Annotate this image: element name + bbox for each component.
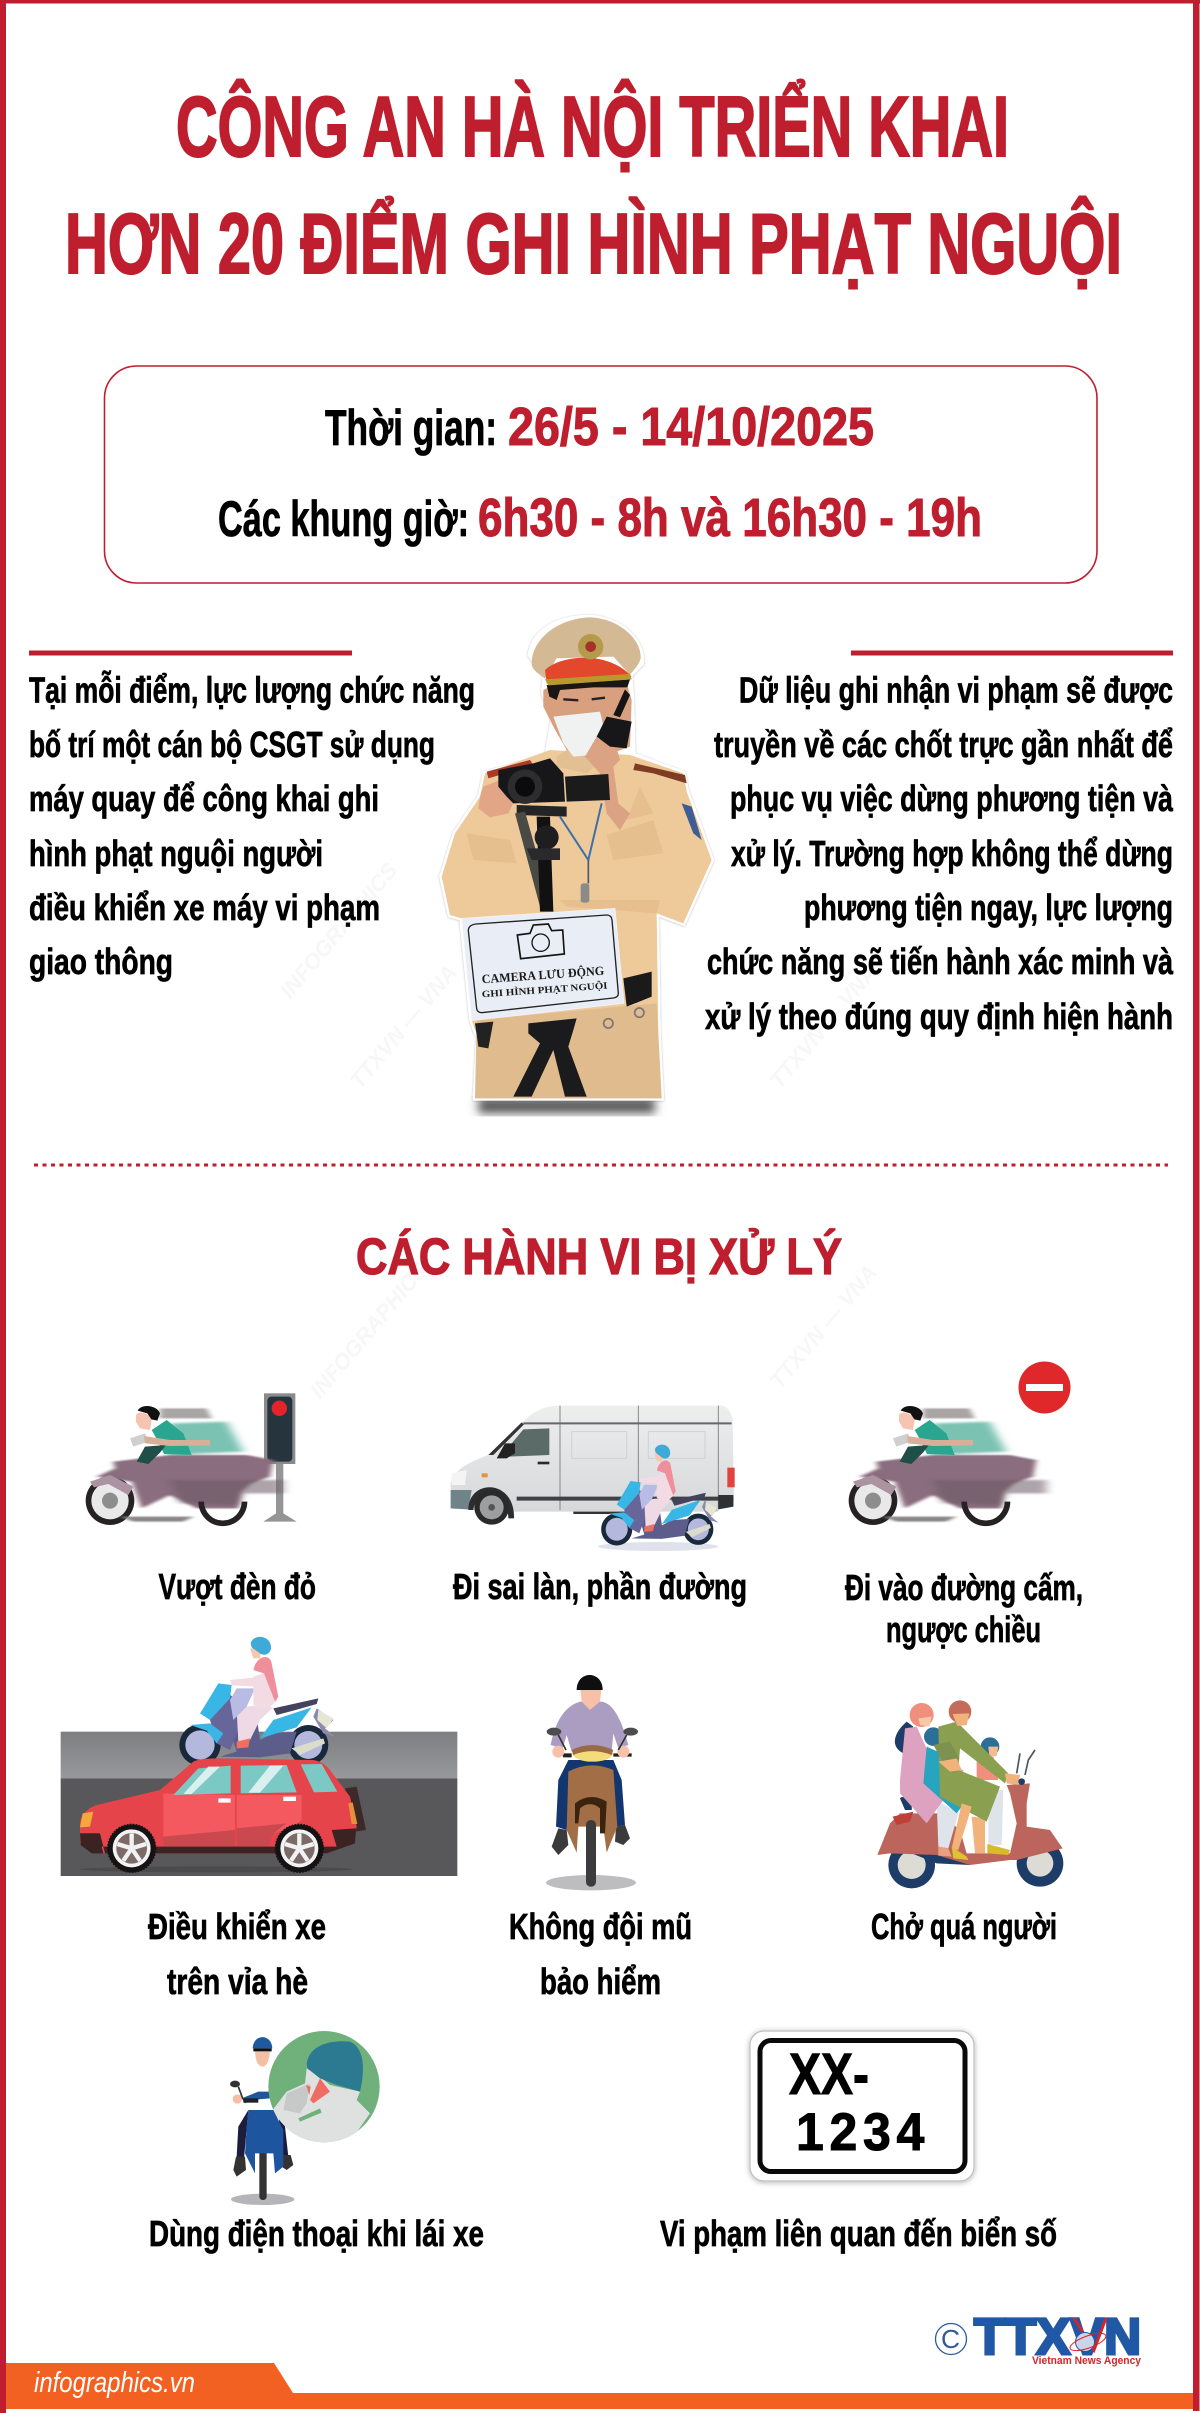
icon: road, scooter and red car	[61, 1637, 457, 1876]
caption	[845, 1567, 1083, 1650]
caption: Vượt đèn đỏ	[158, 1566, 316, 1607]
item: wrong lane	[451, 1406, 747, 1607]
caption: Vi phạm liên quan đến biển số	[660, 2213, 1057, 2254]
caption: Chở quá người	[871, 1906, 1057, 1947]
caption: trên vỉa hè	[167, 1961, 308, 2002]
item: using phone while riding	[149, 2031, 484, 2254]
item: overloaded scooter	[871, 1700, 1063, 1947]
photo: traffic officer with camera	[442, 617, 712, 1113]
icon: licence plate: 1234	[796, 2103, 930, 2162]
watermarks	[275, 858, 882, 1403]
caption: Không đội mũ	[509, 1906, 692, 1947]
caption: ngược chiều	[886, 1609, 1041, 1650]
item: licence plate violations	[660, 2031, 1057, 2254]
watermarks: TTXVN — VNA	[345, 960, 462, 1093]
panel: time box: Các khung giờ:	[218, 491, 469, 547]
icon: rider without helmet	[546, 1675, 638, 1890]
panel: time box: 26/5 - 14/10/2025	[508, 397, 874, 457]
caption: bảo hiểm	[540, 1961, 661, 2002]
text block: left description: giao thông	[29, 941, 173, 982]
item: forbidden road, wrong way	[845, 1362, 1083, 1650]
dotted divider	[34, 1164, 1168, 1166]
icon: speeding rider and traffic light	[86, 1393, 297, 1526]
text block: left description: điều khiển xe máy vi phạm	[29, 887, 380, 928]
panel: time box	[104, 366, 1097, 583]
caption	[509, 1906, 692, 2002]
text block: left description: hình phạt nguội người	[29, 833, 323, 874]
icon: four people on a scooter	[877, 1700, 1063, 1888]
logo: TTXVN: C	[941, 2324, 960, 2354]
icon: van and scooter	[451, 1406, 735, 1551]
footer band: infographics.vn	[34, 2367, 195, 2399]
text block: left description: bố trí một cán bộ CSGT sử dụng	[29, 724, 435, 765]
heading: behaviours: CÁC HÀNH VI BỊ XỬ LÝ	[356, 1227, 842, 1285]
text block: left description: Tại mỗi điểm, lực lượng chức năng	[29, 670, 475, 710]
caption: Điều khiển xe	[148, 1906, 326, 1947]
title	[65, 79, 1122, 292]
icon: no entry sign	[1018, 1362, 1070, 1414]
item: running a red light	[86, 1393, 316, 1607]
icon: licence plate	[750, 2031, 974, 2181]
item: riding on the pavement	[61, 1637, 457, 2002]
panel: time box: 6h30 - 8h và 16h30 - 19h	[478, 488, 982, 548]
sign: mobile camera notice: CAMERA LƯU ĐỘNG	[481, 964, 605, 986]
sign: mobile camera notice	[462, 908, 624, 1021]
sign: mobile camera notice: GHI HÌNH PHẠT NGUỘI	[481, 979, 608, 1000]
caption	[148, 1906, 326, 2002]
icon: licence plate: XX-	[789, 2042, 869, 2107]
footer band	[6, 2363, 1193, 2409]
text block: left description	[29, 650, 475, 982]
item: no helmet	[509, 1675, 692, 2002]
text block: left description: máy quay để công khai ghi	[29, 778, 379, 819]
watermarks: TTXVN — VNA	[765, 960, 882, 1093]
panel: time box: Thời gian:	[325, 400, 497, 456]
caption: Đi vào đường cấm,	[845, 1567, 1083, 1608]
icon: rider using a phone	[230, 2031, 380, 2205]
caption: Dùng điện thoại khi lái xe	[149, 2213, 484, 2254]
watermarks: TTXVN — VNA	[765, 1260, 882, 1393]
text block: right description	[705, 650, 1174, 1037]
icon: speeding rider	[849, 1406, 1046, 1526]
logo: TTXVN: TTXVN	[974, 2308, 1141, 2365]
logo: TTXVN: Vietnam News Agency	[1032, 2355, 1142, 2367]
caption: Đi sai làn, phần đường	[453, 1566, 747, 1607]
watermarks: INFOGRAPHICS	[305, 1258, 432, 1403]
watermarks: INFOGRAPHICS	[275, 858, 402, 1003]
